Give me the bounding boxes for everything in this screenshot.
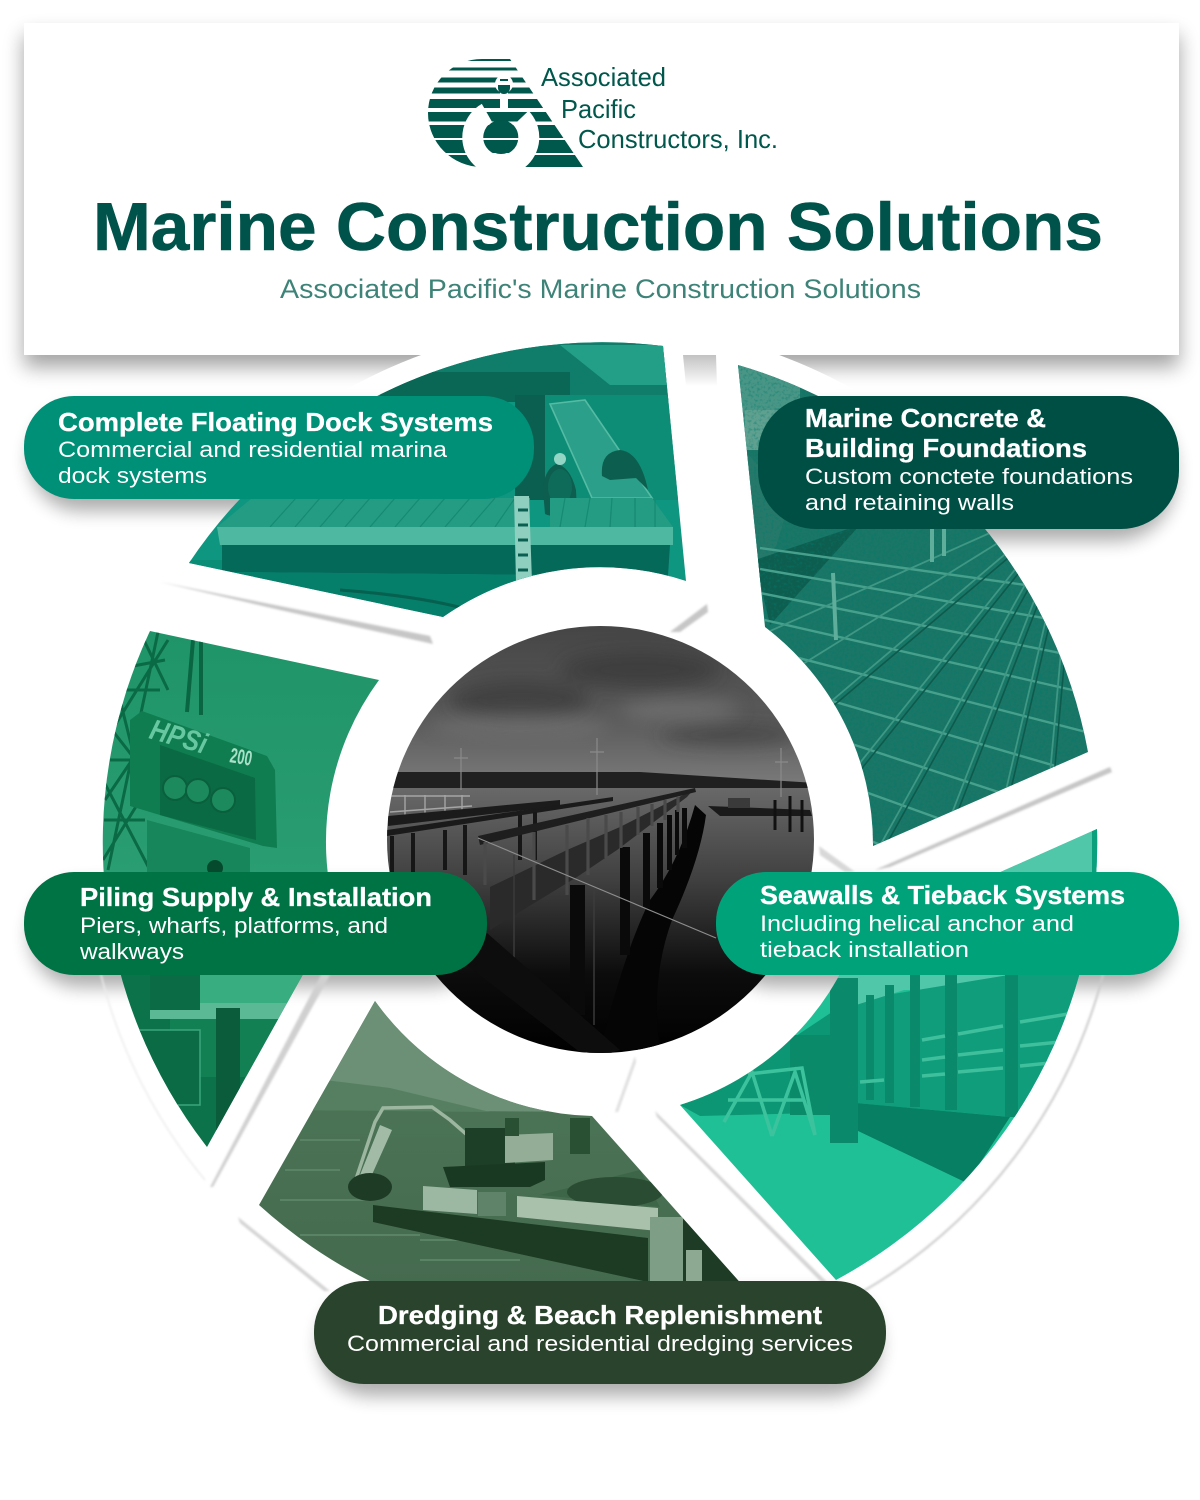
callout: piling: [24, 872, 487, 975]
callout: marine concrete: Custom conctete foundations: [805, 464, 1133, 489]
concrete barrier: [517, 1196, 658, 1231]
columns: [570, 808, 687, 1015]
callout: seawalls: [716, 872, 1179, 975]
photo segment: piling: [95, 625, 385, 1155]
deck surface: [217, 498, 530, 527]
lower box: [147, 820, 250, 875]
segment edge shadows: [101, 582, 1112, 1300]
dark piling: [515, 395, 545, 500]
logo wordmark: Pacific: [561, 94, 636, 124]
barge machinery: [423, 1186, 477, 1214]
callout: marine concrete: Marine Concrete &: [805, 403, 1046, 433]
horizon: [385, 772, 815, 788]
logo wordmark: Constructors, Inc.: [578, 124, 778, 154]
water: [385, 785, 817, 1055]
right dock: [708, 806, 812, 816]
hammer gears: [163, 776, 235, 812]
glass rail wire: [478, 838, 716, 938]
shore and dredge spoils: [540, 1170, 660, 1207]
sky wedges: [858, 990, 904, 1004]
chains: [187, 640, 201, 715]
logo wordmark: [541, 62, 778, 154]
far trees: [680, 1014, 830, 1116]
A-frames: [724, 1068, 815, 1136]
excavator cab and body: [465, 1128, 515, 1166]
rebar fan lines: [770, 532, 1062, 843]
foreground pile: [216, 1008, 240, 1130]
center photo: pier at dusk: [385, 625, 817, 1060]
deck: [490, 790, 693, 930]
barge hull: [373, 1205, 648, 1282]
callout: floating docks: Commercial and residential marina: [58, 437, 448, 462]
callout: marine concrete: [758, 396, 1179, 529]
callout: dredging: Dredging & Beach Replenishment: [378, 1300, 822, 1330]
callout: dredging: Commercial and residential dredging services: [347, 1331, 853, 1356]
gap shadow between top segments: [683, 355, 717, 386]
callout: seawalls: Seawalls & Tieback Systems: [760, 880, 1125, 910]
foreground post: [650, 1217, 683, 1287]
far pilings: [570, 1118, 590, 1154]
logo wordmark: Associated: [541, 62, 666, 92]
shadow joints: [834, 558, 1064, 840]
header panel: [24, 23, 1179, 355]
vertical posts: [833, 523, 944, 640]
rebar cross lines: [760, 546, 1084, 844]
callout: floating docks: dock systems: [58, 463, 207, 488]
crane lattice: [103, 632, 168, 870]
dirt mound: [348, 1173, 392, 1201]
subtitle: Associated Pacific's Marine Construction Solutions: [280, 274, 921, 304]
title: Marine Construction Solutions: [93, 189, 1103, 265]
wall rails: [860, 1012, 1080, 1082]
callout: seawalls: Including helical anchor and: [760, 911, 1074, 936]
clouds: [450, 652, 800, 745]
deck rim: [217, 527, 673, 545]
excavator arm: [354, 1105, 465, 1177]
callout: floating docks: [24, 396, 534, 499]
masts: [454, 738, 788, 797]
sand speckle: [730, 360, 1100, 860]
photo segment: dredging: [259, 1001, 739, 1281]
near railing: [478, 788, 696, 845]
callout: piling: walkways: [79, 939, 184, 964]
callout: dredging: [314, 1281, 886, 1384]
finger dock: [550, 400, 652, 498]
callout: piling: Piling Supply & Installation: [80, 882, 432, 912]
pontoon side: [222, 545, 670, 576]
company logo: [420, 59, 778, 167]
callout: marine concrete: Building Foundations: [805, 433, 1087, 463]
photo segment: concrete foundations: [738, 365, 1088, 846]
wall panels: [858, 975, 1080, 1118]
lower ground: [120, 975, 303, 1147]
water: [232, 572, 670, 617]
logo mark: [420, 59, 590, 167]
workers: [543, 450, 648, 517]
vibro hammer body: [130, 711, 277, 848]
hammer model number: 200: [228, 744, 254, 771]
hammer markings: HPSi: [146, 714, 211, 761]
white wheel backing disc: [83, 323, 1117, 1357]
left far dock: [390, 795, 472, 818]
callout: piling: Piers, wharfs, platforms, and: [80, 913, 388, 938]
header drop shadow: [24, 35, 1179, 367]
excavator tracks: [443, 1162, 545, 1187]
callout: seawalls: tieback installation: [760, 937, 969, 962]
glass base: [460, 933, 620, 1060]
reflection: [600, 805, 706, 1050]
pill shadows: [30, 408, 1175, 1396]
gauge: [514, 496, 532, 582]
photo segment: seawall: [670, 820, 1110, 1290]
second rail: [387, 797, 613, 836]
photo segment: floating dock: [180, 340, 700, 630]
callout: floating docks: Complete Floating Dock Systems: [58, 407, 493, 437]
callout: marine concrete: and retaining walls: [805, 490, 1014, 515]
wall piles: [830, 975, 1018, 1143]
